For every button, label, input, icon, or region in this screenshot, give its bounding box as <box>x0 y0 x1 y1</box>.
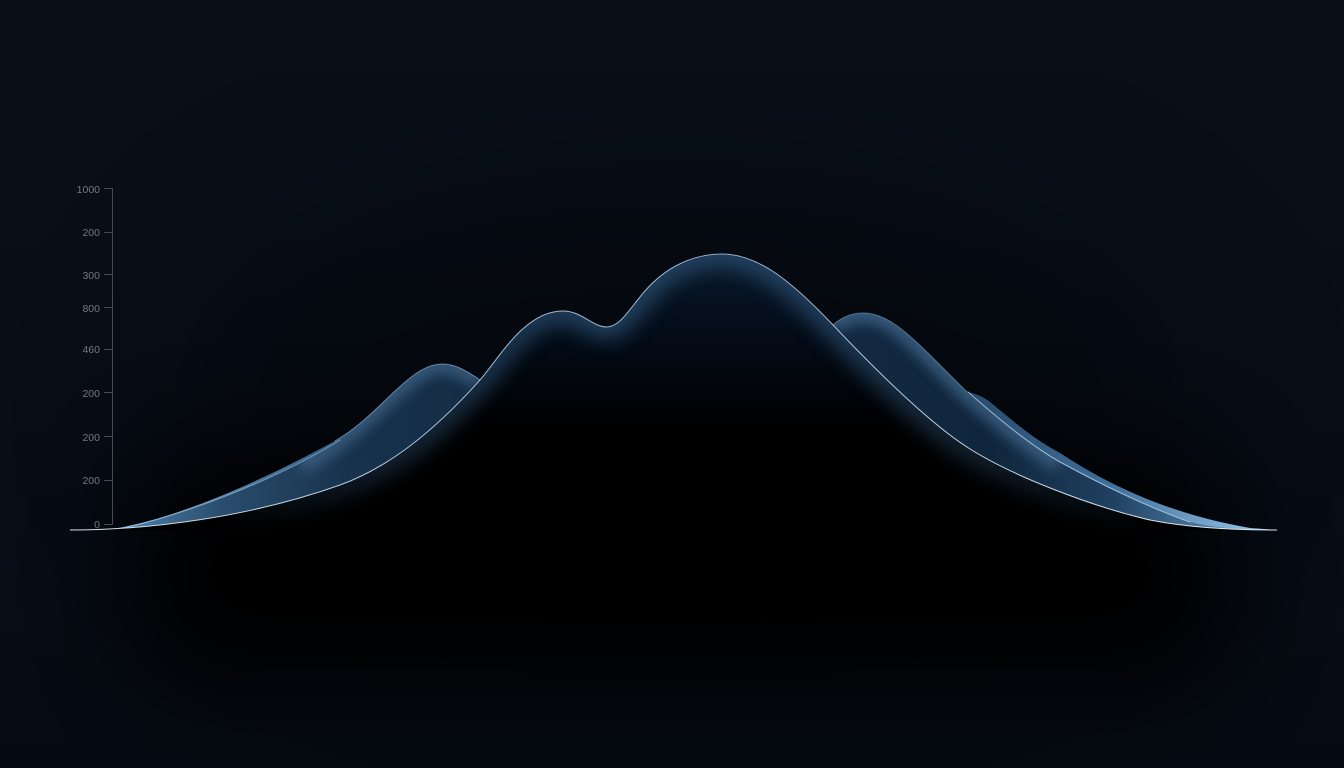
soft darkening behind the curves <box>180 180 1180 620</box>
left sliver <box>105 440 340 530</box>
y axis with ticks and labels: 1000 <box>77 184 100 196</box>
y axis with ticks and labels: 200 <box>82 388 100 400</box>
y axis with ticks and labels: 800 <box>82 303 100 315</box>
dark shadow beneath the baseline <box>130 450 1230 690</box>
y axis with ticks and labels: 300 <box>82 270 100 282</box>
y axis with ticks and labels: 460 <box>82 344 100 356</box>
back layer: left hump <box>116 364 480 528</box>
right sliver <box>968 392 1277 530</box>
front layer: main peak outline <box>70 254 1277 530</box>
y axis with ticks and labels: 200 <box>82 475 100 487</box>
layered curve chart <box>70 186 1277 710</box>
y axis with ticks and labels: 0 <box>94 519 100 531</box>
back layer outlines <box>125 313 1190 528</box>
front layer: main peak body <box>104 254 1244 530</box>
y axis with ticks and labels: 200 <box>82 227 100 239</box>
back layer: right hump <box>833 313 1277 530</box>
y axis with ticks and labels <box>77 184 112 531</box>
y axis with ticks and labels: 200 <box>82 432 100 444</box>
